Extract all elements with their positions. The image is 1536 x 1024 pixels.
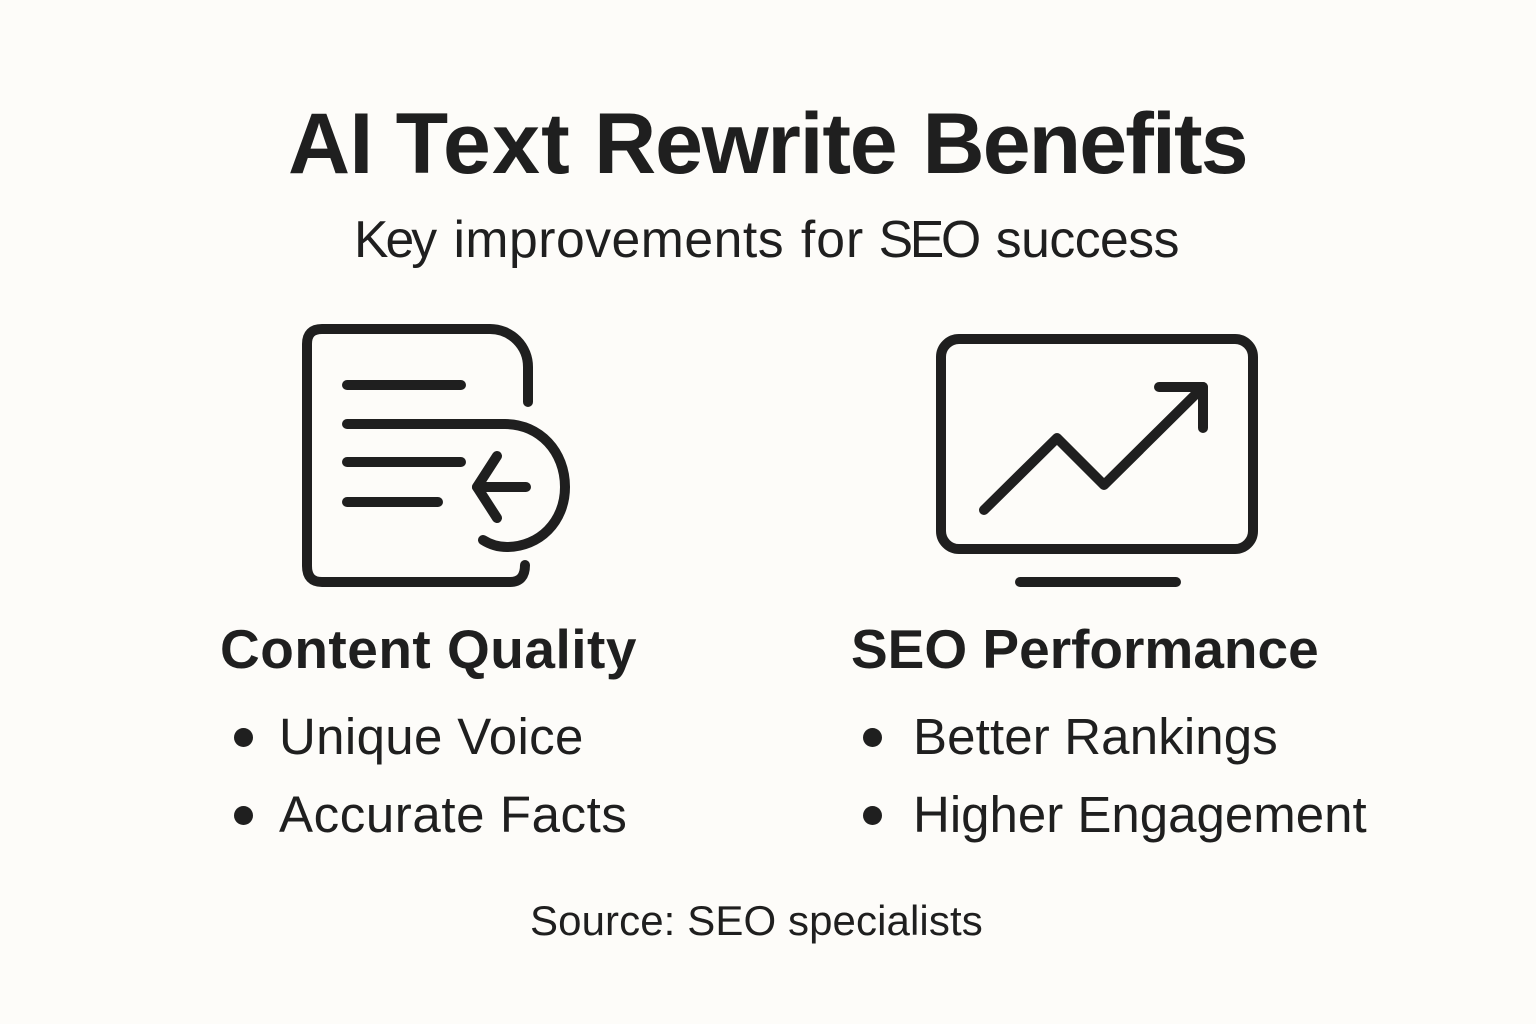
icon: monitor with rising chart — [936, 334, 1258, 587]
heading: content quality: Content Quality — [220, 618, 637, 680]
heading: seo performance: SEO Performance — [851, 618, 1319, 680]
list: seo performance — [863, 708, 1367, 843]
title: AI Text Rewrite Benefits — [288, 96, 1247, 192]
bullet item: unique voice: Unique Voice — [279, 708, 584, 765]
subtitle: Key improvements for SEO success — [354, 210, 1179, 268]
bullet item: better rankings: Better Rankings — [913, 708, 1278, 765]
bullet item: accurate facts: Accurate Facts — [279, 786, 628, 843]
source note: Source: SEO specialists — [530, 897, 983, 944]
list: content quality — [234, 708, 628, 843]
icon: document with rewrite arrow — [302, 324, 570, 587]
bullet item: higher engagement: Higher Engagement — [913, 786, 1367, 843]
